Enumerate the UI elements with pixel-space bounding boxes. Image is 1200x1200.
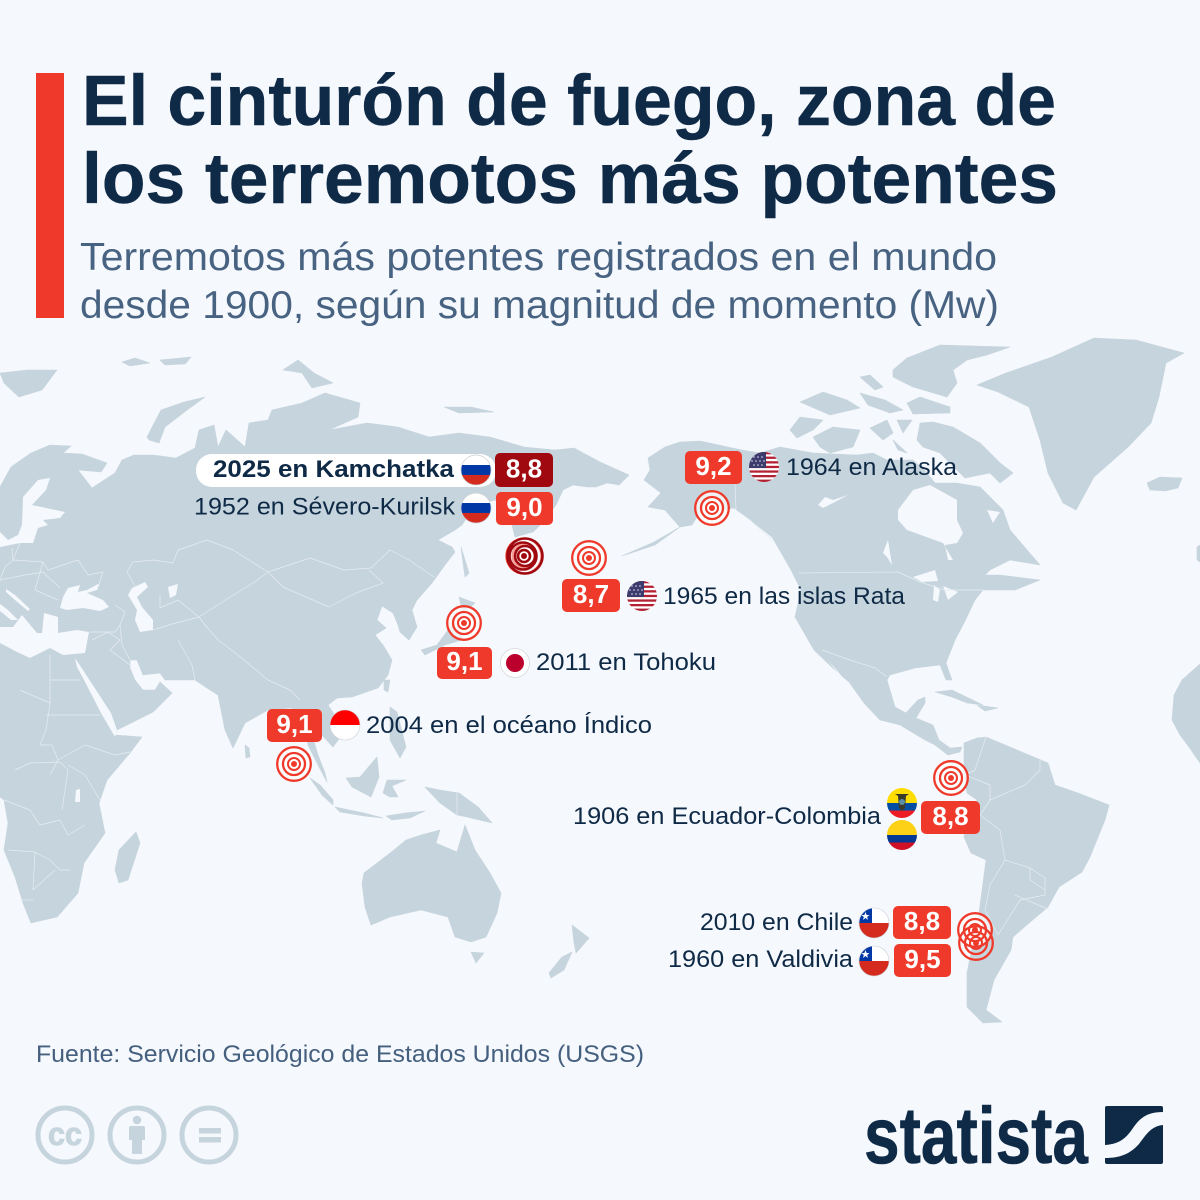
label: 2011 en Tohoku: 2011 en Tohoku xyxy=(536,649,716,676)
label: 2025 en Kamchatka: 2025 en Kamchatka xyxy=(213,456,454,483)
badge: 9,1 Tohoku xyxy=(437,646,492,679)
badge: 9,0: 9,0 xyxy=(506,492,543,522)
icon: creative commons xyxy=(38,1108,92,1162)
epicentre: Ecuador-Colombia xyxy=(934,761,968,795)
statista wordmark: statista xyxy=(864,1091,1088,1180)
flag: Indonesia xyxy=(330,710,360,740)
flag: Colombia xyxy=(887,820,917,850)
flag: Japan xyxy=(500,648,530,678)
red accent bar xyxy=(36,73,64,318)
title: El cinturón de fuego, zona de xyxy=(82,62,1056,141)
epicentre: Kamchatka (dark over red) xyxy=(506,538,542,574)
badge: 8,7: 8,7 xyxy=(573,579,609,609)
epicentre: Tohoku xyxy=(447,606,481,640)
epicentre: Indian Ocean xyxy=(277,747,311,781)
flag: Chile xyxy=(859,908,889,938)
icon: attribution xyxy=(110,1108,164,1162)
flag: USA xyxy=(627,581,657,611)
badge: 8,8 xyxy=(495,453,553,487)
label: 1965 en las islas Rata: 1965 en las islas Rata xyxy=(663,583,905,610)
label: 2010 en Chile: 2010 en Chile xyxy=(700,909,853,936)
badge: 8,7 xyxy=(562,579,620,612)
badge: 9,5: 9,5 xyxy=(904,944,941,974)
flag: Russia xyxy=(461,493,491,523)
badge: 9,1 Indian Ocean: 9,1 xyxy=(276,709,313,739)
label: 1906 en Ecuador-Colombia: 1906 en Ecuador-Colombia xyxy=(573,803,881,830)
badge: 9,1 Indian Ocean xyxy=(267,709,322,742)
subtitle: Terremotos más potentes registrados en el mundo xyxy=(80,236,997,279)
source: Fuente: Servicio Geológico de Estados Unidos (USGS) xyxy=(36,1041,644,1068)
label: 2004 en el océano Índico: 2004 en el océano Índico xyxy=(366,712,652,739)
world map xyxy=(0,338,1200,1023)
epicentre: Valdivia 1960 xyxy=(959,926,993,960)
epicentre: Alaska xyxy=(695,491,729,525)
badge: 8,8: 8,8 xyxy=(506,454,542,484)
subtitle: desde 1900, según su magnitud de momento (Mw) xyxy=(80,284,999,327)
label: 1964 en Alaska: 1964 en Alaska xyxy=(786,454,957,481)
badge: 8,8 Chile: 8,8 xyxy=(904,906,940,936)
title: los terremotos más potentes xyxy=(82,140,1058,219)
label: 1960 en Valdivia: 1960 en Valdivia xyxy=(668,946,853,973)
badge: 9,1 Tohoku: 9,1 xyxy=(446,646,483,676)
icon: no derivatives xyxy=(182,1108,236,1162)
statista logo mark xyxy=(1105,1106,1163,1164)
highlight pill: 2025 Kamchatka xyxy=(196,454,496,487)
flag: USA xyxy=(749,452,779,482)
badge: 9,0 xyxy=(496,492,553,525)
badge: 8,8 Ecuador-Colombia xyxy=(921,801,980,834)
flag: Russia xyxy=(461,455,491,485)
badge: 9,2: 9,2 xyxy=(695,451,732,481)
epicentre: Rat Islands xyxy=(572,541,606,575)
label: 1952 en Sévero-Kurilsk: 1952 en Sévero-Kurilsk xyxy=(194,494,456,520)
icon: creative commons: cc xyxy=(48,1116,82,1152)
flag: Chile xyxy=(859,946,889,976)
badge: 8,8 Ecuador-Colombia: 8,8 xyxy=(932,801,969,831)
badge: 9,5 xyxy=(894,944,951,977)
badge: 8,8 Chile xyxy=(893,906,951,939)
epicentre: Chile 2010 xyxy=(958,913,992,947)
flag: Ecuador xyxy=(887,788,917,818)
badge: 9,2 xyxy=(685,451,742,484)
